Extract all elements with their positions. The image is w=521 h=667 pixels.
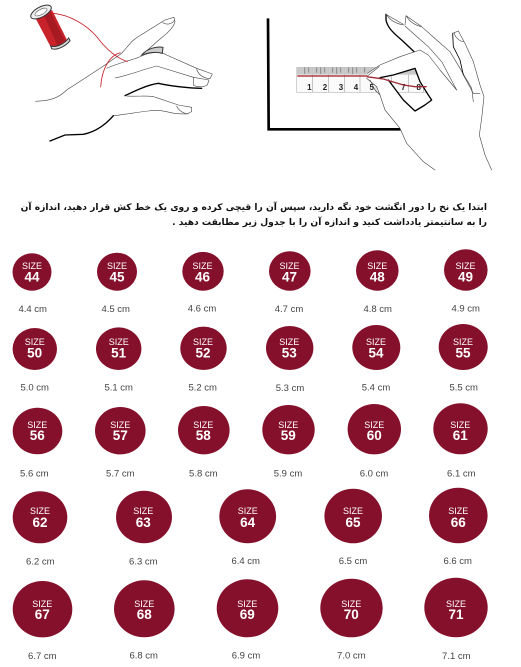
badge: size 46: 46 — [195, 270, 210, 284]
badge: size 45: 4.5 cm — [101, 304, 130, 315]
badge: size 68: SIZE — [134, 599, 154, 609]
badge: size 65: 6.5 cm — [339, 556, 367, 567]
icon: hand outline — [36, 17, 212, 141]
badge: size 70: 70 — [344, 607, 359, 622]
badge: size 62: 6.2 cm — [26, 557, 55, 568]
badge: size 70: 7.0 cm — [337, 650, 366, 661]
badge: size 49: 4.9 cm — [451, 303, 480, 314]
badge: size 67: SIZE — [32, 599, 52, 609]
badge: size 47: 47 — [282, 270, 297, 284]
badge: size 70: SIZE — [341, 599, 361, 609]
badge: size 59: SIZE — [278, 420, 298, 430]
badge: size 61: 61 — [453, 428, 468, 443]
badge: size 49: 49 — [458, 270, 473, 284]
badge: size 68 — [114, 580, 175, 661]
badge: size 48 — [356, 250, 399, 315]
badge: size 47 — [269, 251, 311, 315]
ruler: 7 — [401, 83, 406, 92]
badge: size 49: SIZE — [455, 261, 476, 271]
badge: size 69 — [217, 579, 278, 661]
badge: size 59: 5.9 cm — [274, 468, 302, 479]
badge: size 53: 5.3 cm — [276, 383, 304, 394]
badge: size 58: SIZE — [193, 420, 213, 430]
badge: size 48: SIZE — [367, 261, 387, 271]
badge: size 66: 6.6 cm — [443, 556, 472, 567]
badge: size 54: 54 — [368, 346, 384, 360]
badge: size 56: SIZE — [27, 420, 47, 430]
ruler: 8 — [416, 83, 421, 92]
illustration: hand with thread and spool — [29, 2, 212, 141]
badge: size 55: 55 — [455, 346, 471, 360]
badge: size 66: 66 — [451, 515, 466, 530]
text block: Persian instructions: ابتدا یک نخ را دور انگشت خود نگه دارید، سپس آن را قیچی کرده و روی یک خط کش قرار دهید، اندازه آن — [21, 203, 487, 213]
badge: size 71: 7.1 cm — [442, 651, 471, 662]
badge: size 44: SIZE — [22, 261, 42, 271]
badge: size 65: SIZE — [343, 506, 363, 516]
badge: size 44: 4.4 cm — [18, 304, 47, 315]
badge: size 50: 50 — [27, 346, 42, 360]
red thread pinched — [367, 77, 427, 87]
badge: size 69: SIZE — [237, 599, 257, 609]
badge: size 65 — [324, 489, 382, 567]
badge: size 71 — [424, 578, 488, 662]
badge: size 46: 4.6 cm — [188, 303, 216, 314]
badge: size 63: SIZE — [133, 506, 153, 516]
badge: size 68: 68 — [137, 607, 152, 622]
badge: size 45: SIZE — [107, 261, 127, 271]
badge: size 50: SIZE — [25, 337, 45, 347]
badge: size 64: 6.4 cm — [231, 556, 260, 567]
badge: size 61 — [433, 403, 488, 479]
badge: size 62: 62 — [32, 515, 48, 530]
illustration: hand measuring thread on ruler — [268, 14, 492, 170]
badge: size 65: 65 — [345, 515, 361, 530]
ruler: 1 — [307, 83, 312, 92]
badge: size 63 — [116, 491, 172, 568]
badge: size 67: 6.7 cm — [28, 651, 57, 662]
badge: size 61: 6.1 cm — [447, 468, 476, 479]
badge: size 51: SIZE — [109, 337, 129, 347]
ruler — [297, 67, 426, 92]
badge: size 48: 48 — [370, 270, 385, 284]
badge: size 62 — [13, 491, 67, 568]
badge: size 53 — [266, 326, 313, 394]
ruler: 5 — [369, 83, 374, 92]
badge: size 55: SIZE — [453, 337, 473, 347]
badge: size 62: SIZE — [30, 506, 50, 516]
badge: size 70 — [320, 579, 383, 661]
badge: size 66: SIZE — [448, 506, 468, 516]
badge: size 63: 6.3 cm — [129, 557, 158, 568]
ruler: 3 — [339, 83, 344, 92]
badge: size 52: 5.2 cm — [188, 382, 217, 393]
frame corner — [268, 18, 402, 129]
icon: red thread around finger — [53, 13, 128, 87]
badge: size 55: 5.5 cm — [449, 382, 478, 393]
badge: size 45 — [97, 253, 137, 315]
badge: size 68: 6.8 cm — [129, 650, 158, 661]
badge: size 60: 6.0 cm — [360, 468, 388, 479]
badge: size 50 — [13, 328, 57, 393]
badge: size 71: 71 — [448, 607, 464, 622]
badge: size 59 — [262, 405, 315, 479]
badge: size 51: 5.1 cm — [104, 382, 133, 393]
icon: measuring hand — [367, 14, 492, 170]
badge: size 60 — [348, 404, 401, 479]
badge: size 59: 59 — [281, 428, 296, 443]
badge: size 50: 5.0 cm — [20, 382, 49, 393]
badge: size 49 — [444, 249, 488, 314]
badge: size 54 — [352, 325, 400, 393]
badge: size 45: 45 — [109, 270, 125, 284]
badge: size 69: 69 — [240, 607, 255, 622]
badge: size 47: SIZE — [279, 261, 300, 271]
badge: size 57 — [95, 407, 146, 479]
badge: size 69: 6.9 cm — [232, 650, 260, 661]
badge: size 67: 67 — [35, 607, 50, 622]
badge: size 54: 5.4 cm — [362, 382, 390, 393]
badge: size 71: SIZE — [446, 599, 466, 609]
badge: size 64 — [219, 489, 276, 567]
badge: size 53: 53 — [282, 346, 297, 360]
badge: size 51 — [96, 327, 141, 393]
badge: size 51: 51 — [111, 346, 127, 360]
badge: size 53: SIZE — [279, 337, 299, 347]
badge: size 52 — [180, 327, 227, 393]
badge: size 47: 4.7 cm — [275, 304, 303, 315]
badge: size 52: SIZE — [193, 337, 213, 347]
badge: size 46: SIZE — [192, 261, 213, 271]
badge: size 67 — [13, 581, 72, 662]
badge: size 57: 57 — [113, 428, 128, 443]
badge: size 52: 52 — [195, 346, 211, 360]
badge: size 55 — [439, 324, 488, 393]
ruler: 2 — [323, 83, 328, 92]
badge: size 60: SIZE — [364, 420, 384, 430]
icon: red thread spool — [29, 2, 70, 49]
badge: size 58: 5.8 cm — [189, 468, 218, 479]
badge: size 60: 60 — [367, 428, 382, 443]
badge: size 44: 44 — [24, 270, 40, 284]
badge: size 54: SIZE — [366, 337, 386, 347]
badge: size 64: 64 — [240, 515, 256, 530]
badge: size 58: 58 — [196, 428, 211, 443]
badge: size 46 — [182, 252, 224, 314]
ruler: 4 — [354, 83, 359, 92]
badge: size 57: 5.7 cm — [106, 468, 135, 479]
badge: size 56: 56 — [30, 428, 45, 443]
badge: size 61: SIZE — [450, 420, 470, 430]
badge: size 63: 63 — [136, 515, 151, 530]
badge: size 48: 4.8 cm — [363, 304, 392, 315]
text block: Persian instructions — [21, 201, 487, 228]
badge: size 56 — [13, 408, 62, 479]
badge: size 56: 5.6 cm — [20, 468, 49, 479]
text block: Persian instructions: را به سانتیمتر یادداشت کنید و اندازه آن را با جدول زیر مطابقت دهید . — [172, 218, 487, 228]
badge: size 44 — [12, 253, 52, 315]
badge: size 57: SIZE — [110, 420, 130, 430]
badge: size 58 — [178, 406, 230, 479]
badge: size 66 — [429, 488, 488, 567]
badge: size 64: SIZE — [238, 506, 258, 516]
